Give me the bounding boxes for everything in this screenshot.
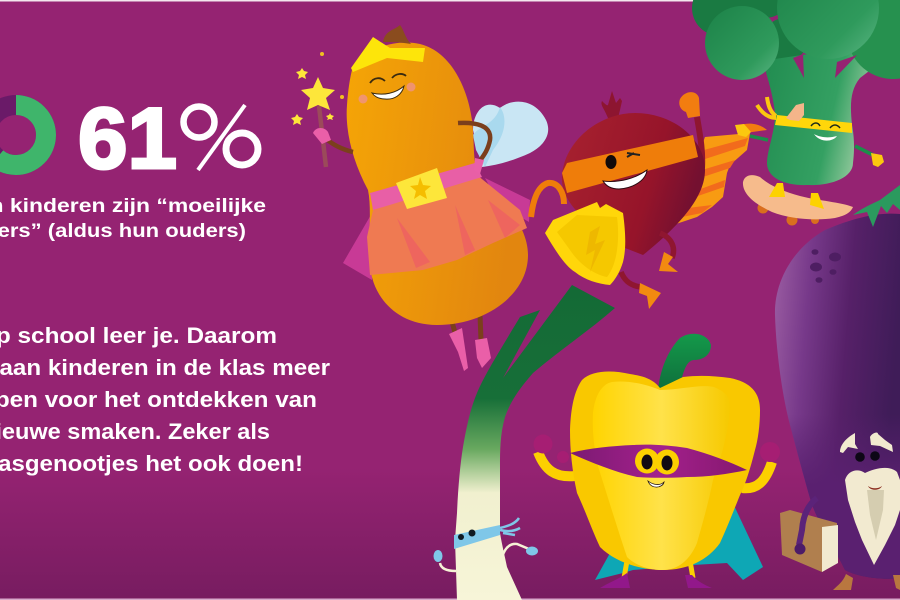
beard xyxy=(845,468,900,565)
eyes xyxy=(635,448,679,474)
feet xyxy=(833,574,900,590)
face xyxy=(811,123,840,141)
character: leek xyxy=(434,285,615,600)
stalk and leaves xyxy=(455,285,615,600)
sparkle stars xyxy=(291,52,344,125)
character: beetroot hero xyxy=(531,91,767,309)
headband xyxy=(775,115,852,133)
eyes xyxy=(458,530,476,540)
percent sign xyxy=(184,105,258,170)
pigtail xyxy=(531,183,564,217)
crown xyxy=(351,37,425,72)
scarf tip xyxy=(740,124,767,133)
raised arm xyxy=(697,117,702,168)
wand star xyxy=(301,77,335,110)
body paragraph xyxy=(0,323,330,476)
smile xyxy=(648,481,664,487)
boots xyxy=(600,573,712,588)
legs xyxy=(621,233,674,287)
shield xyxy=(545,202,625,285)
stem xyxy=(383,25,411,44)
glove xyxy=(679,92,700,118)
boots xyxy=(449,328,491,371)
arms xyxy=(750,136,873,155)
cape stripes xyxy=(682,138,748,217)
mouth xyxy=(868,486,882,490)
book case xyxy=(780,510,838,572)
eyes xyxy=(855,451,880,462)
character: broccoli skater xyxy=(692,0,900,226)
hands xyxy=(735,124,884,167)
bottom edge line xyxy=(0,598,900,600)
spots xyxy=(810,249,841,283)
big statistic 61%: 61 xyxy=(78,91,177,187)
headband xyxy=(454,525,500,549)
mask xyxy=(570,445,747,478)
hand and cuff xyxy=(313,128,484,174)
statistic caption xyxy=(0,196,266,242)
legs xyxy=(624,555,693,578)
skateboard xyxy=(743,175,853,219)
back skirt xyxy=(343,178,530,280)
arms xyxy=(538,452,772,488)
arm xyxy=(799,498,817,545)
hand xyxy=(794,544,806,554)
cape xyxy=(673,133,750,225)
stem xyxy=(658,334,711,390)
skirt xyxy=(367,175,527,275)
eyes and smile xyxy=(603,153,647,189)
legs xyxy=(452,315,481,340)
body xyxy=(570,372,760,570)
character: yellow pepper hero xyxy=(534,334,780,588)
character: eggplant wizard xyxy=(775,185,900,590)
back florets xyxy=(692,0,807,62)
lower body shade xyxy=(775,214,900,579)
hands xyxy=(434,546,538,562)
wheels xyxy=(758,202,819,226)
inner beard xyxy=(867,490,884,540)
belt xyxy=(370,163,482,210)
cape xyxy=(595,497,763,580)
center lobe xyxy=(593,382,730,570)
character: butternut fairy xyxy=(291,25,548,371)
bandage xyxy=(786,103,804,121)
florets xyxy=(705,0,900,80)
wand xyxy=(319,106,326,167)
buckle xyxy=(396,168,447,209)
cap leaves xyxy=(853,185,900,227)
ribbons xyxy=(757,97,776,118)
big statistic 61% xyxy=(78,91,258,187)
gloves xyxy=(534,434,780,463)
wings xyxy=(473,102,548,167)
feet xyxy=(639,252,678,309)
arms xyxy=(325,123,490,162)
stalk and body xyxy=(766,45,873,185)
top edge line xyxy=(0,0,694,2)
shoes xyxy=(769,183,824,209)
ribbons xyxy=(500,518,520,535)
body xyxy=(347,42,528,325)
body xyxy=(562,113,705,255)
body xyxy=(775,214,900,579)
donut chart: 61% xyxy=(0,105,46,165)
background gaps between stalks xyxy=(793,54,857,78)
arms xyxy=(440,544,529,571)
eyebrows xyxy=(840,433,893,453)
headband xyxy=(562,135,698,193)
leaves xyxy=(601,91,622,118)
face xyxy=(358,74,416,104)
